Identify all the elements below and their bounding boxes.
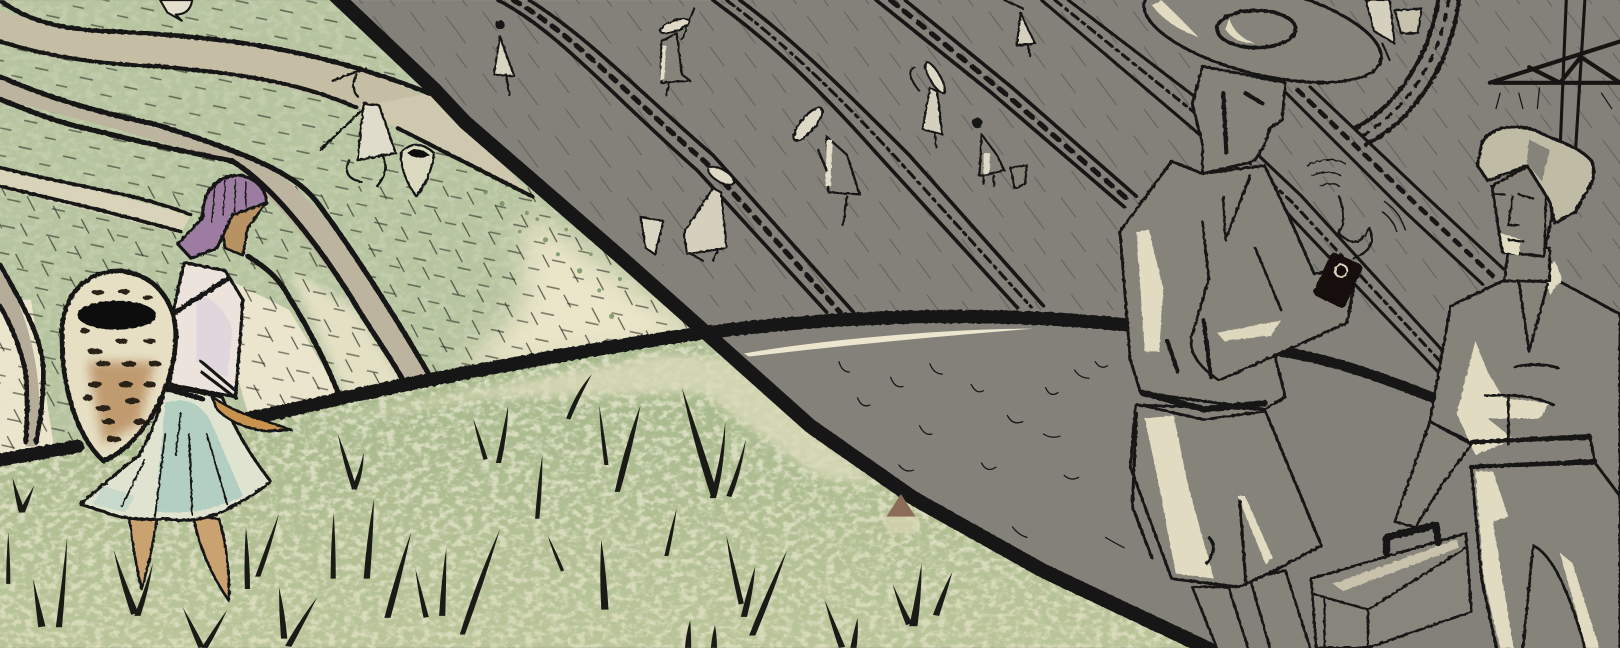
worker 2 — [658, 8, 694, 95]
band 1 — [498, 0, 853, 312]
worker 4 with hat — [789, 104, 860, 225]
panel: green terraced hill — [0, 0, 723, 475]
face — [1492, 165, 1554, 256]
worker 7 — [1004, 0, 1035, 56]
arm — [212, 397, 291, 431]
terrace ink lines — [0, 0, 532, 442]
head — [1192, 66, 1285, 174]
curved band near pivot — [1356, 0, 1459, 145]
pale strip under horizon — [294, 353, 878, 486]
face — [219, 203, 267, 255]
band 5 — [1286, 87, 1503, 284]
wide-brim hat — [1134, 0, 1391, 103]
irrigation pivot tower — [1490, 0, 1620, 150]
shorts — [1130, 405, 1321, 587]
signal lines — [1307, 160, 1405, 258]
skirt — [81, 387, 271, 520]
purple headscarf — [178, 176, 267, 258]
diagonal ridge line — [336, 0, 1213, 648]
horizon line — [0, 317, 1620, 460]
head wrap — [1477, 127, 1594, 223]
basket on hill — [401, 145, 434, 196]
legs — [1192, 570, 1311, 648]
left arm and hand — [1395, 422, 1471, 527]
belt and blouse trim — [165, 279, 236, 399]
woven basket — [62, 271, 176, 461]
shorts folds — [1132, 413, 1246, 584]
terrace path bands — [0, 10, 434, 110]
trousers — [1471, 463, 1620, 648]
marker: small brown triangle — [883, 494, 920, 533]
panel: grassy foreground — [0, 340, 1190, 648]
phone in hand — [1312, 251, 1364, 309]
figure: farmer with basket on hill — [320, 68, 434, 196]
torso — [1430, 281, 1620, 496]
legs — [129, 517, 229, 601]
figure: man with hat using a phone — [1120, 0, 1405, 648]
shirt — [1120, 161, 1358, 409]
figure: tiny farmer at top of hill — [160, 0, 192, 21]
band 4 — [1041, 0, 1453, 372]
shorts highlight — [1145, 415, 1214, 579]
shirt lines — [1471, 281, 1595, 467]
band 2 — [713, 0, 1043, 308]
cream highlight under horizon — [744, 329, 1033, 357]
band 3 — [876, 0, 1136, 207]
grass tufts — [6, 374, 953, 648]
worker 5 — [910, 60, 948, 147]
worker 8 with bucket — [1366, 0, 1422, 60]
neck and collar — [1504, 248, 1550, 281]
worker 3 with buckets — [641, 163, 737, 260]
worker 1 — [494, 21, 515, 95]
cream sunlit slope — [458, 210, 703, 366]
shirt highlights — [1136, 229, 1163, 351]
speckled moss — [484, 190, 622, 319]
figure: second man with suitcase — [1311, 127, 1620, 648]
suitcase — [1311, 525, 1471, 648]
blouse — [170, 263, 243, 397]
small grey-field farmers — [494, 0, 1422, 260]
lower field scale marks — [839, 362, 1147, 548]
diagonal bands: terraces made of circuit and binary patterns — [498, 0, 1503, 372]
waist and sleeve folds — [1141, 176, 1281, 420]
worker 6 — [973, 119, 1027, 188]
figure: woman with woven basket — [62, 176, 291, 601]
skirt folds — [122, 413, 227, 517]
panel: grey digital hillside — [336, 0, 1620, 648]
